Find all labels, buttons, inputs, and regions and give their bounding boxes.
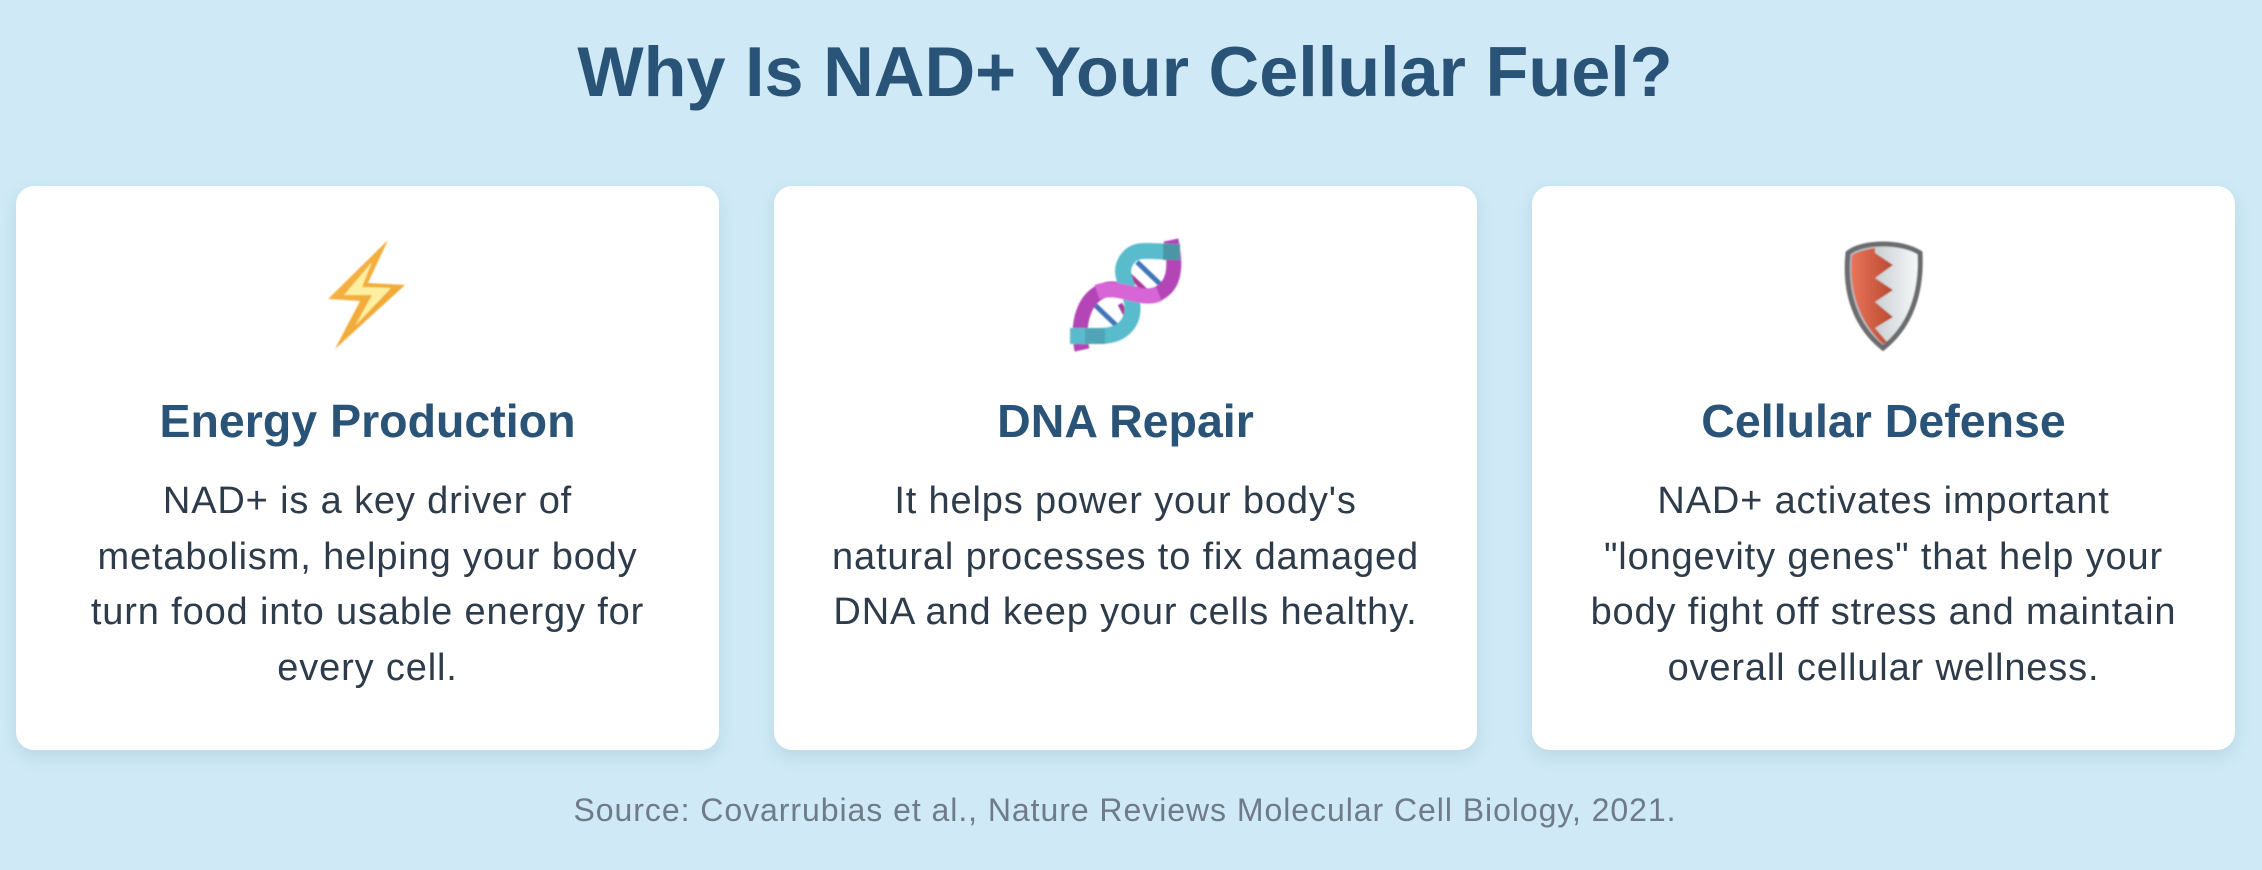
text block: DNA and keep your cells healthy. [833, 591, 1418, 633]
icon: dna helix [1069, 238, 1182, 352]
text block: NAD+ is a key driver of [163, 480, 572, 522]
text block [91, 480, 644, 689]
icon: lightning bolt [328, 240, 406, 350]
text block: metabolism, helping your body [97, 536, 638, 578]
text block: turn food into usable energy for [91, 591, 644, 633]
text block: natural processes to fix damaged [832, 536, 1419, 578]
text block [832, 480, 1419, 633]
text block: overall cellular wellness. [1668, 647, 2099, 689]
panel: dna repair [774, 186, 1477, 750]
heading: Energy Production [160, 395, 575, 447]
title: Why Is NAD+ Your Cellular Fuel? [577, 32, 1673, 111]
heading: Cellular Defense [1701, 395, 2066, 447]
panel: energy production [16, 186, 719, 750]
text block [1591, 480, 2176, 689]
text block: body fight off stress and maintain [1591, 591, 2176, 633]
icon: shield [1844, 240, 1924, 352]
text block: It helps power your body's [894, 480, 1357, 522]
text block: NAD+ activates important [1657, 480, 2110, 522]
text block: "longevity genes" that help your [1604, 536, 2163, 578]
heading: DNA Repair [997, 395, 1254, 447]
source note: Source: Covarrubias et al., Nature Reviews Molecular Cell Biology, 2021. [574, 792, 1676, 828]
text block: every cell. [277, 647, 458, 689]
panel: cellular defense [1532, 186, 2235, 750]
